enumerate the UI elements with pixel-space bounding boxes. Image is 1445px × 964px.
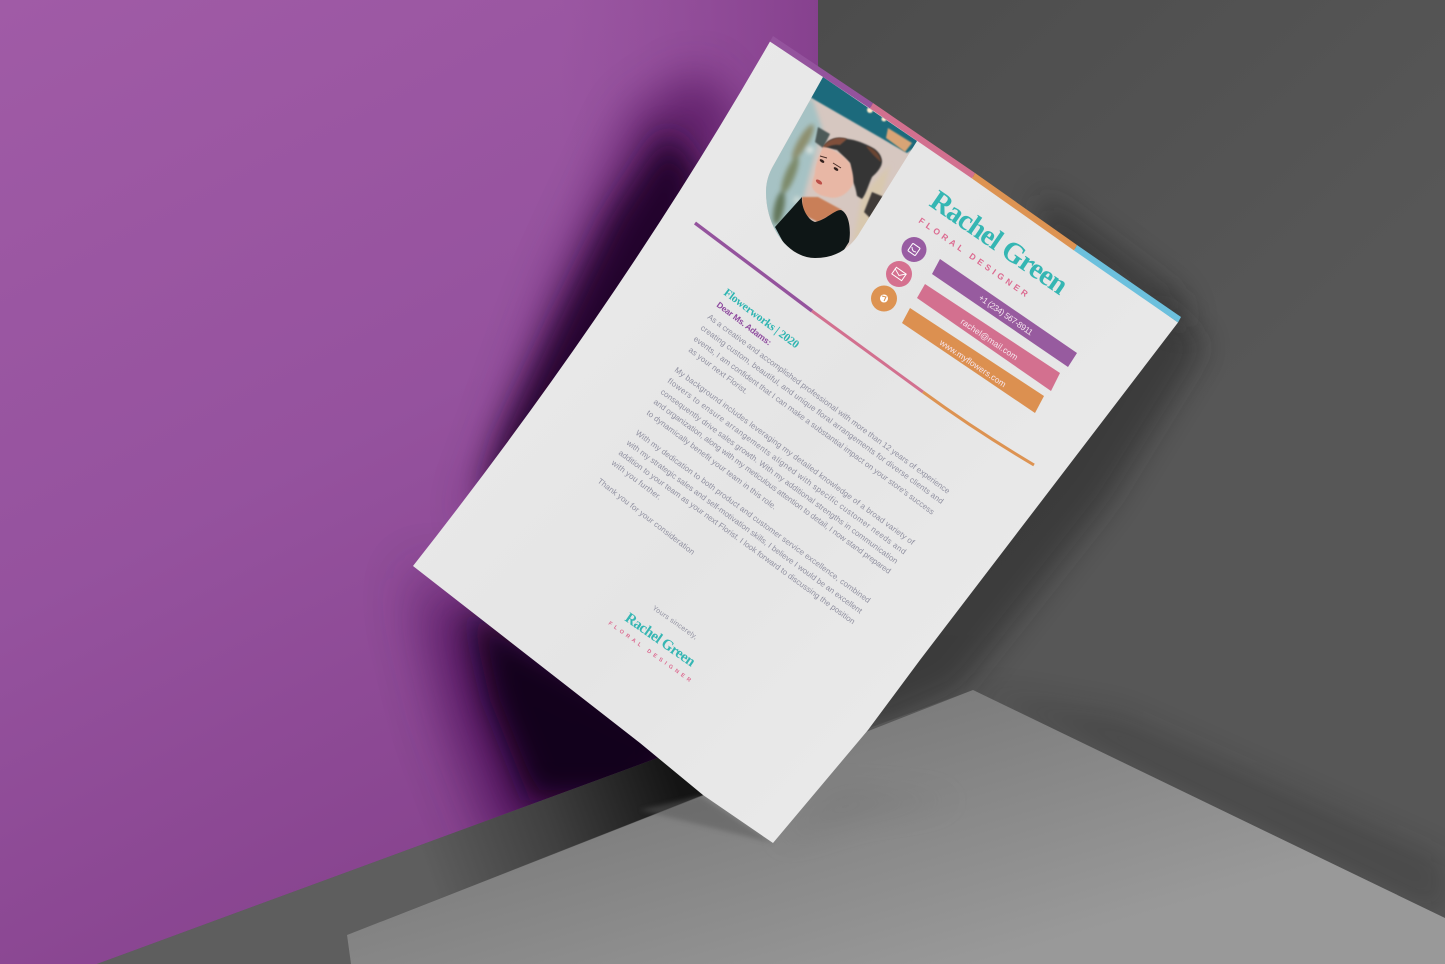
- contact bar: phone: [932, 259, 1077, 367]
- portrait photo: [766, 77, 917, 258]
- neck and chest: [802, 197, 842, 222]
- divider line: [695, 223, 1034, 465]
- paragraph 2: to dynamically benefit your team in this role.: [645, 408, 778, 511]
- sign-off: Yours sincerely,: [651, 605, 698, 641]
- paragraph 2: and organization, along with my meticulous attention to detail, I now stand prepared: [652, 397, 893, 576]
- icon: phone: [902, 237, 926, 262]
- face: [812, 147, 853, 198]
- background: grey platform: [347, 690, 1445, 964]
- contact bar: phone: +1 (234) 567-8911: [977, 292, 1035, 337]
- contact bar: website: [902, 308, 1044, 413]
- photo backdrop: [766, 77, 917, 258]
- top colour stripe: [770, 36, 1181, 322]
- salutation: Dear Ms. Adams:: [715, 300, 774, 347]
- paragraph 2: flowers to ensure arrangements aligned with specific customer needs and: [666, 376, 908, 556]
- hair: [823, 138, 882, 199]
- plants behind subject: [771, 122, 817, 226]
- paragraph 3: with my strategic sales and self-motivation skills, I believe I would be an excellent: [624, 438, 865, 616]
- paragraph 3: With my dedication to both product and customer service excellence, combined: [634, 428, 872, 605]
- background: floor strip: [97, 730, 760, 964]
- background: grey wall: [818, 0, 1445, 964]
- paragraph 2: My background includes leveraging my detailed knowledge of a broad variety of: [673, 365, 917, 547]
- paper sheet: [413, 36, 1181, 843]
- paragraph 1: events, I am confident that I can make a substantial impact on your store's success: [692, 334, 936, 516]
- icon: globe: [871, 286, 897, 312]
- job title: FLORAL DESIGNER: [917, 215, 1030, 299]
- signature title: FLORAL DESIGNER: [607, 621, 692, 684]
- paragraph 3: with you further.: [609, 458, 663, 502]
- signature name: Rachel Green: [622, 610, 699, 671]
- paragraph 1: as your next Florist.: [687, 345, 750, 396]
- paragraph 1: creating custom, beautiful, and unique floral arrangements for diverse clients and: [699, 323, 945, 506]
- icon: mail: [886, 261, 912, 287]
- paragraph 2: consequently drive sales growth. With my additional strengths in communication: [659, 387, 900, 566]
- black top: [775, 197, 850, 259]
- contact bar: email: rachel@mail.com: [959, 316, 1020, 362]
- contact bar: email: [917, 284, 1060, 391]
- background: purple wall: [0, 0, 818, 964]
- letter heading: Flowerworks | 2020: [721, 287, 801, 351]
- paragraph 1: As a creative and accomplished professional with more than 12 years of experience: [706, 312, 952, 496]
- contact bar: website: www.myflowers.com: [937, 337, 1008, 389]
- shadow on purple wall: [420, 70, 740, 860]
- paragraph 3: addition to your team as your next Florist. I look forward to discussing the position: [617, 448, 857, 626]
- name heading: Rachel Green: [924, 184, 1074, 301]
- closing line: Thank you for your consideration: [596, 476, 696, 557]
